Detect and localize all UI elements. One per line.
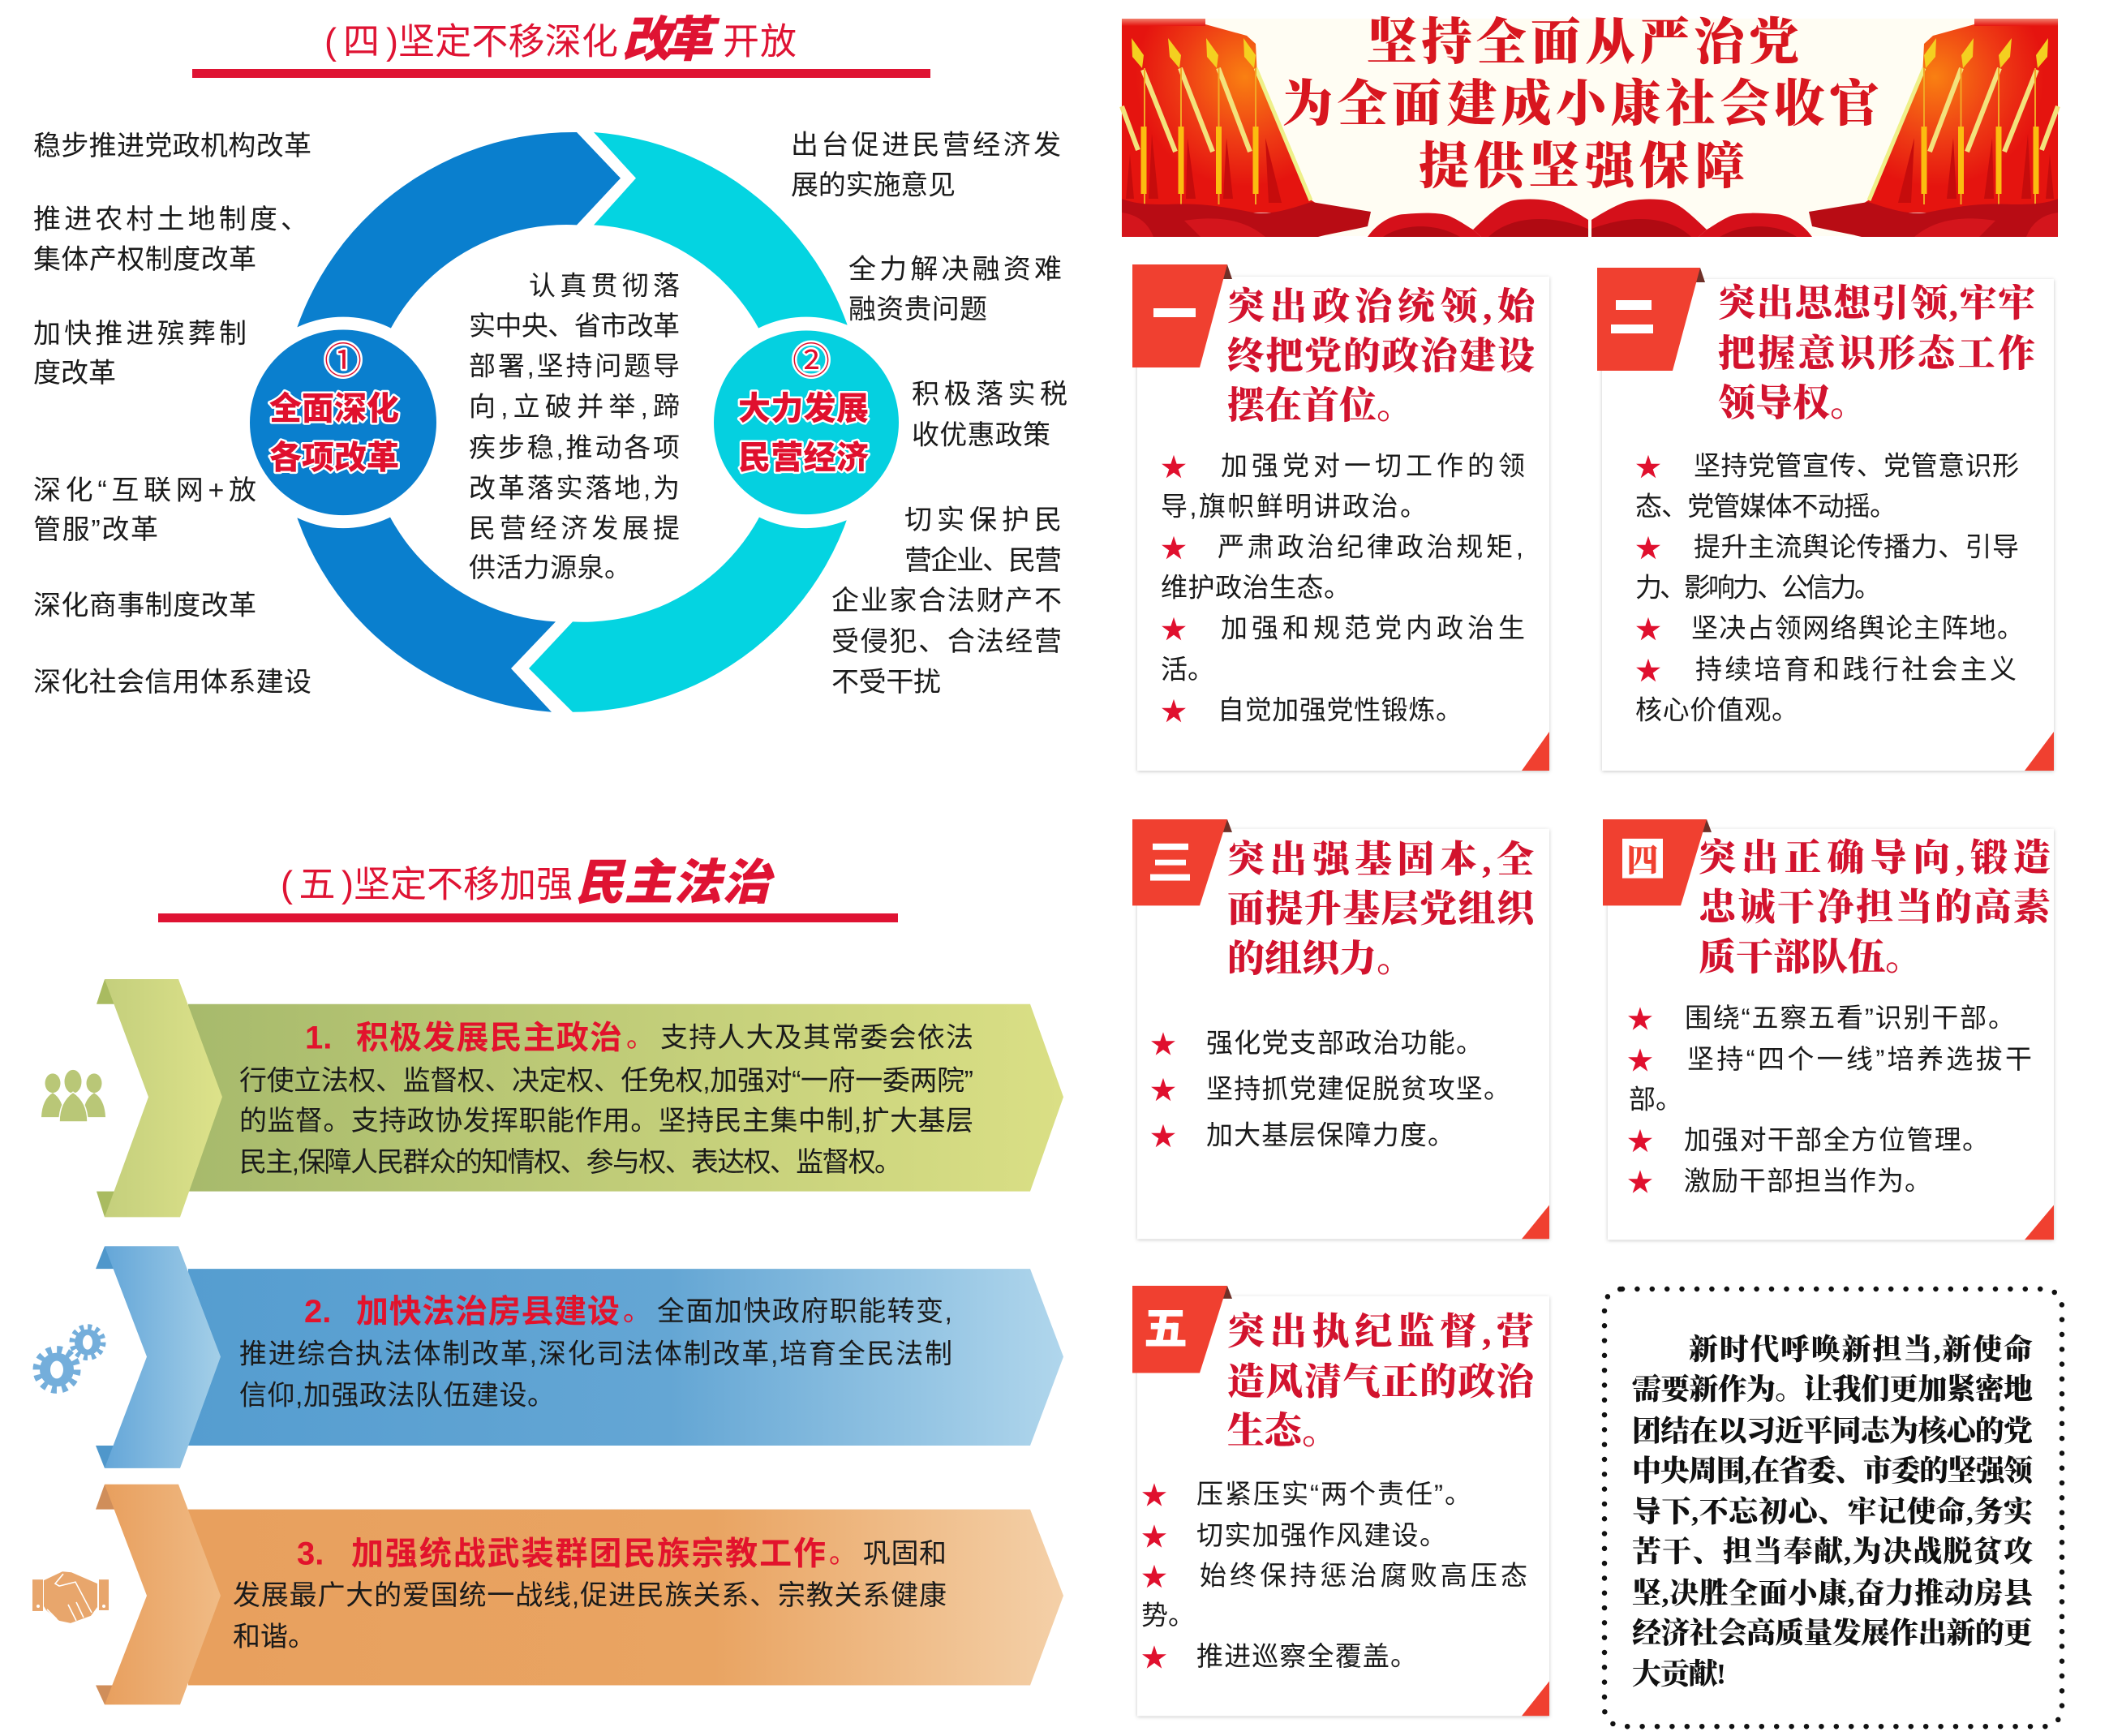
panel: card four bbox=[1603, 819, 2054, 1240]
text: ring centre: 供活力源泉。 bbox=[469, 552, 631, 582]
list: card three: 强化党支部政治功能。 bbox=[1206, 1028, 1483, 1058]
banner: rule of law bbox=[37, 1246, 1063, 1468]
text: left reform items bbox=[33, 131, 311, 698]
text: closing statement: 需要新作为。让我们更加紧密地 bbox=[1632, 1372, 2033, 1405]
text: ring centre: 认真贯彻落 bbox=[529, 270, 680, 300]
text: right private economy items: 不受干扰 bbox=[831, 667, 941, 698]
icon: handshake bbox=[32, 1571, 109, 1623]
heading: card three: 面提升基层党组织 bbox=[1227, 888, 1538, 930]
list: card two: 力、影响力、公信力。 bbox=[1635, 573, 1881, 602]
arrow: cyan arc bbox=[529, 132, 864, 712]
icon: corner bbox=[2025, 732, 2054, 771]
text: democratic politics: 行使立法权、监督权、决定权、任免权,加强对“一府一委两院” bbox=[239, 1065, 973, 1096]
text: right private economy items: 融资贵问题 bbox=[848, 294, 987, 325]
list: card five: 切实加强作风建设。 bbox=[1196, 1520, 1446, 1550]
panel: card one bbox=[1132, 264, 1549, 771]
title: 提供坚强保障 bbox=[1419, 139, 1745, 195]
list: card five: 势。 bbox=[1141, 1600, 1195, 1630]
panel: title banner bbox=[1121, 15, 2059, 237]
heading: card three bbox=[1227, 839, 1538, 980]
text: united front: 和谐。 bbox=[233, 1622, 316, 1652]
decoration: right flags and ribbons bbox=[1591, 19, 2058, 237]
heading: card five: 造风清气正的政治 bbox=[1227, 1361, 1538, 1403]
text: right private economy items: 营企业、民营 bbox=[904, 545, 1062, 576]
list: card two: 提升主流舆论传播力、引导 bbox=[1694, 532, 2019, 561]
text: closing statement bbox=[1632, 1333, 2035, 1690]
heading: card three: 突出强基固本,全 bbox=[1227, 839, 1534, 880]
heading: card one: 摆在首位。 bbox=[1227, 385, 1414, 427]
list: card four: 围绕“五察五看”识别干部。 bbox=[1685, 1003, 2015, 1033]
panel: closing statement dotted box bbox=[1604, 1289, 2062, 1726]
heading: section five: 民主法治 bbox=[575, 855, 775, 910]
heading: card one bbox=[1227, 286, 1539, 427]
heading: card two: 把握意识形态工作 bbox=[1718, 333, 2035, 375]
list: card one: 导,旗帜鲜明讲政治。 bbox=[1161, 492, 1427, 521]
icon: corner bbox=[2025, 1205, 2054, 1240]
list: card two: 坚持党管宣传、党管意识形 bbox=[1694, 451, 2019, 480]
heading: card four: 质干部队伍。 bbox=[1699, 937, 1922, 978]
icon: corner bbox=[1522, 1205, 1549, 1239]
text: closing statement: 团结在以习近平同志为核心的党 bbox=[1632, 1415, 2033, 1447]
text: left reform items: 深化“互联网+放 bbox=[33, 475, 256, 505]
text: united front: 3. bbox=[297, 1536, 324, 1571]
text: united front bbox=[233, 1536, 947, 1652]
heading: section four: (四) bbox=[324, 21, 398, 62]
list: card three bbox=[1150, 1025, 1510, 1154]
list: card two: 坚决占领网络舆论主阵地。 bbox=[1691, 613, 2024, 642]
text: democratic politics: 支持人大及其常委会依法 bbox=[660, 1023, 973, 1054]
list: card two: 持续培育和践行社会主义 bbox=[1695, 654, 2017, 685]
list: card four: ★ bbox=[1627, 1162, 1653, 1200]
text: left reform items: 度改革 bbox=[33, 358, 116, 389]
tab: number one bbox=[1132, 264, 1232, 367]
title: 为全面建成小康社会收官 bbox=[1282, 75, 1879, 132]
list: card four: 部。 bbox=[1629, 1085, 1682, 1115]
text: closing statement: 导下,不忘初心、牢记使命,务实 bbox=[1632, 1495, 2034, 1528]
list: card five: ★ bbox=[1141, 1557, 1167, 1594]
list: card five: ★ bbox=[1141, 1476, 1167, 1513]
text: united front: 发展最广大的爱国统一战线,促进民族关系、宗教关系健康 bbox=[233, 1580, 947, 1611]
text: rule of law: 。 bbox=[623, 1296, 651, 1327]
arrow: blue arc bbox=[281, 132, 621, 712]
text: democratic politics: 民主,保障人民群众的知情权、参与权、表达权、监督权。 bbox=[239, 1147, 902, 1178]
heading: card four: 突出正确导向,锻造 bbox=[1699, 837, 2051, 879]
node: private economy: 民营经济 bbox=[738, 440, 869, 476]
decoration: left flags and ribbons bbox=[1122, 19, 1588, 237]
heading: card five bbox=[1227, 1311, 1538, 1452]
text: left reform items: 管服”改革 bbox=[33, 514, 158, 545]
heading: card two bbox=[1718, 282, 2035, 423]
text: left reform items: 推进农村土地制度、 bbox=[33, 204, 308, 234]
text: closing statement: 经济社会高质量发展作出新的更 bbox=[1632, 1616, 2033, 1649]
list: card two: 核心价值观。 bbox=[1635, 694, 1798, 725]
list: card two: ★ bbox=[1635, 609, 1661, 647]
text: ring centre: 疾步稳,推动各项 bbox=[469, 432, 680, 462]
text: ring centre: 民营经济发展提 bbox=[469, 513, 680, 544]
text: right private economy items: 全力解决融资难 bbox=[848, 254, 1062, 285]
tab: number five bbox=[1132, 1286, 1232, 1373]
list: card four: 坚持“四个一线”培养选拔干 bbox=[1687, 1044, 2032, 1074]
text: rule of law bbox=[239, 1294, 952, 1411]
banner: united front bbox=[32, 1485, 1063, 1704]
list: card five: 推进巡察全覆盖。 bbox=[1196, 1641, 1417, 1671]
list: card five: ★ bbox=[1141, 1516, 1167, 1553]
list: card three: ★ bbox=[1150, 1025, 1176, 1061]
list: card four: ★ bbox=[1627, 1121, 1653, 1158]
list: card one: 维护政治生态。 bbox=[1161, 573, 1351, 602]
text: right private economy items: 积极落实税 bbox=[912, 379, 1067, 410]
list: card two: ★ bbox=[1635, 447, 1661, 484]
list: card four: 激励干部担当作为。 bbox=[1684, 1166, 1931, 1196]
icon: corner bbox=[1522, 1682, 1549, 1716]
text: democratic politics: 1. bbox=[305, 1021, 332, 1056]
node: comprehensive reform bbox=[237, 317, 449, 528]
node: private economy: ② bbox=[792, 339, 830, 381]
text: left reform items: 深化社会信用体系建设 bbox=[33, 667, 311, 698]
text: rule of law: 信仰,加强政法队伍建设。 bbox=[239, 1380, 555, 1411]
text: closing statement: 大贡献! bbox=[1632, 1658, 1726, 1690]
heading: section four: 开放 bbox=[723, 21, 797, 62]
list: card one: ★ bbox=[1161, 528, 1187, 565]
text: left reform items: 深化商事制度改革 bbox=[33, 591, 256, 621]
node: comprehensive reform: ① bbox=[324, 339, 362, 381]
heading: card five: 生态。 bbox=[1227, 1411, 1339, 1452]
text: rule of law: 加快法治房县建设 bbox=[356, 1294, 620, 1330]
list: card one: 活。 bbox=[1161, 654, 1214, 685]
heading: card four: 忠诚干净担当的高素 bbox=[1699, 887, 2051, 928]
panel: card five bbox=[1132, 1286, 1549, 1716]
heading: card two: 领导权。 bbox=[1718, 383, 1867, 423]
text: right private economy items: 切实保护民 bbox=[904, 505, 1062, 535]
list: card one bbox=[1161, 447, 1525, 728]
list: card three: 加大基层保障力度。 bbox=[1206, 1120, 1454, 1149]
panel: section four reform and opening bbox=[33, 130, 1067, 712]
list: card two: 态、党管媒体不动摇。 bbox=[1635, 492, 1896, 521]
text: ring centre: 实中央、省市改革 bbox=[469, 311, 680, 341]
list: card three: ★ bbox=[1150, 1116, 1176, 1154]
list: card five: 压紧压实“两个责任”。 bbox=[1196, 1479, 1471, 1509]
heading: card five: 突出执纪监督,营 bbox=[1227, 1311, 1534, 1352]
text: democratic politics: 。 bbox=[626, 1023, 654, 1054]
text: left reform items: 加快推进殡葬制 bbox=[33, 319, 247, 349]
icon: corner bbox=[1522, 732, 1549, 771]
text: united front: 。 bbox=[829, 1538, 857, 1569]
text: rule of law: 2. bbox=[304, 1294, 331, 1330]
text: right private economy items: 收优惠政策 bbox=[912, 420, 1050, 451]
text: closing statement: 中央周围,在省委、市委的坚强领 bbox=[1632, 1454, 2035, 1487]
title: 坚持全面从严治党 bbox=[1367, 15, 1799, 71]
list: card five: 始终保持惩治腐败高压态 bbox=[1200, 1561, 1527, 1591]
list: card two: ★ bbox=[1635, 528, 1661, 565]
heading: section four: 坚定不移深化 bbox=[398, 21, 618, 62]
chart: circular arrow ring bbox=[237, 132, 913, 712]
heading: section four: 改革 bbox=[622, 13, 720, 67]
list: card three: ★ bbox=[1150, 1070, 1176, 1107]
node: private economy: 大力发展 bbox=[738, 391, 869, 427]
text: ring centre bbox=[469, 270, 680, 582]
heading: card four bbox=[1699, 837, 2051, 978]
heading: card one: 终把党的政治建设 bbox=[1227, 336, 1535, 376]
text: closing statement: 新时代呼唤新担当,新使命 bbox=[1689, 1333, 2033, 1366]
text: right private economy items: 出台促进民营经济发 bbox=[791, 130, 1061, 161]
list: card one: 自觉加强党性锻炼。 bbox=[1218, 694, 1463, 725]
list: card two: ★ bbox=[1635, 651, 1661, 688]
text: rule of law: 全面加快政府职能转变, bbox=[657, 1296, 952, 1327]
heading: section five: 坚定不移加强 bbox=[354, 863, 573, 905]
text: right private economy items: 展的实施意见 bbox=[791, 170, 956, 201]
list: card one: 严肃政治纪律政治规矩, bbox=[1218, 532, 1523, 561]
tab: number four bbox=[1603, 819, 1712, 905]
text: right private economy items: 企业家合法财产不 bbox=[831, 586, 1062, 616]
node: private economy bbox=[700, 317, 913, 528]
list: card five: ★ bbox=[1141, 1638, 1167, 1675]
banner: democratic politics bbox=[41, 979, 1063, 1217]
text: democratic politics: 积极发展民主政治 bbox=[356, 1021, 622, 1056]
icon: people bbox=[41, 1069, 105, 1122]
heading: section four bbox=[192, 13, 930, 78]
text: ring centre: 向,立破并举,蹄 bbox=[469, 392, 680, 421]
list: card four: ★ bbox=[1627, 1040, 1653, 1077]
list: card four bbox=[1627, 999, 2032, 1200]
heading: section five bbox=[158, 855, 898, 922]
icon: gears bbox=[37, 1327, 103, 1390]
node: comprehensive reform: 全面深化 bbox=[269, 391, 399, 427]
panel: card two bbox=[1597, 268, 2054, 771]
list: card four: ★ bbox=[1627, 999, 1653, 1037]
tab: number five: 五 bbox=[1144, 1294, 1188, 1357]
list: card five bbox=[1141, 1476, 1527, 1675]
list: card one: ★ bbox=[1161, 447, 1187, 484]
list: card four: 加强对干部全方位管理。 bbox=[1684, 1124, 1989, 1154]
text: democratic politics bbox=[239, 1021, 973, 1178]
text: united front: 巩固和 bbox=[863, 1538, 947, 1569]
list: card one: ★ bbox=[1161, 609, 1187, 647]
text: closing statement: 坚,决胜全面小康,奋力推动房县 bbox=[1632, 1576, 2034, 1609]
heading: card two: 突出思想引领,牢牢 bbox=[1718, 282, 2035, 324]
text: left reform items: 稳步推进党政机构改革 bbox=[33, 131, 311, 161]
text: democratic politics: 的监督。支持政协发挥职能作用。坚持民主集中制,扩大基层 bbox=[239, 1106, 973, 1137]
list: card one: 加强党对一切工作的领 bbox=[1221, 451, 1525, 480]
list: card three: 坚持抓党建促脱贫攻坚。 bbox=[1206, 1074, 1510, 1104]
text: united front: 加强统战武装群团民族宗教工作 bbox=[351, 1536, 826, 1571]
text: left reform items: 集体产权制度改革 bbox=[33, 244, 256, 275]
heading: card three: 的组织力。 bbox=[1227, 939, 1414, 980]
text: closing statement: 苦干、担当奉献,为决战脱贫攻 bbox=[1632, 1535, 2033, 1567]
list: card two bbox=[1635, 447, 2024, 725]
panel: section five democracy and rule of law bbox=[32, 855, 1063, 1704]
tab: number four: 四 bbox=[1626, 835, 1659, 881]
group: banners bbox=[32, 979, 1063, 1704]
text: right private economy items bbox=[791, 130, 1067, 698]
heading: section five: (五) bbox=[281, 863, 354, 905]
heading: card one: 突出政治统领,始 bbox=[1227, 286, 1539, 328]
list: card one: 加强和规范党内政治生 bbox=[1221, 613, 1525, 642]
title bbox=[1282, 15, 1879, 195]
text: ring centre: 部署,坚持问题导 bbox=[469, 351, 680, 381]
node: comprehensive reform: 各项改革 bbox=[269, 440, 399, 476]
panel: card three bbox=[1132, 819, 1549, 1239]
list: card one: ★ bbox=[1161, 691, 1187, 728]
text: ring centre: 改革落实落地,为 bbox=[469, 473, 680, 503]
text: rule of law: 推进综合执法体制改革,深化司法体制改革,培育全民法制 bbox=[239, 1339, 952, 1370]
text: right private economy items: 受侵犯、合法经营 bbox=[831, 626, 1062, 657]
tab: number three bbox=[1132, 819, 1232, 905]
tab: number two bbox=[1597, 268, 1705, 371]
